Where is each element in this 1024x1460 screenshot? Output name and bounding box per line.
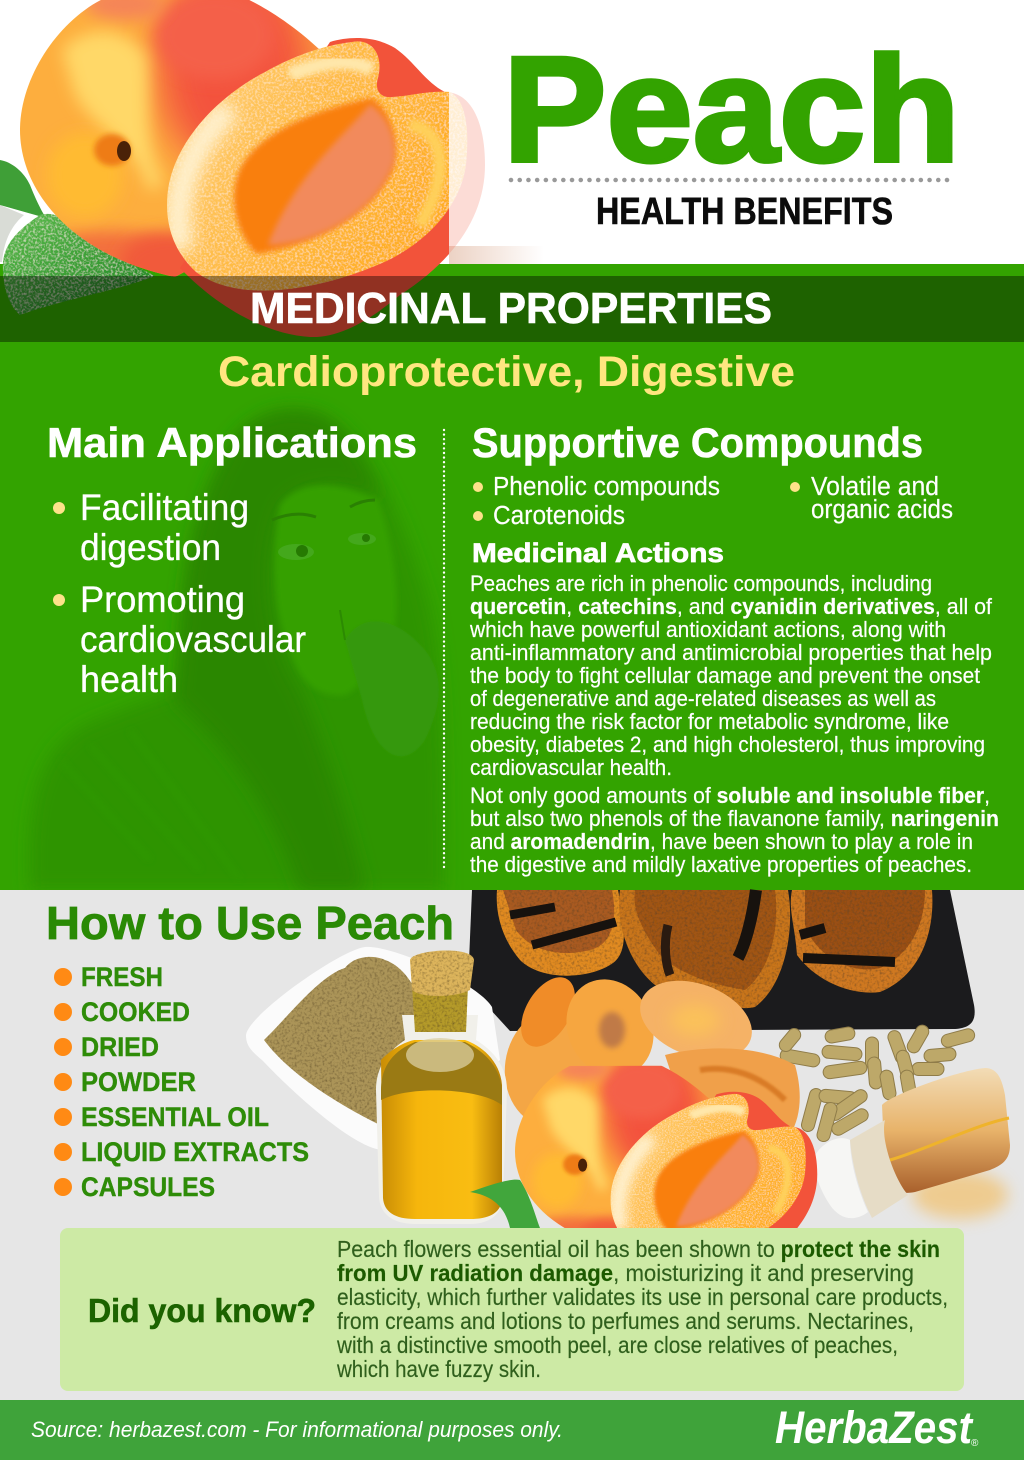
source note: Source: herbazest.com - For informational purposes only. [31, 1417, 563, 1442]
heading: supportive compounds: Supportive Compounds [472, 419, 923, 466]
list: forms of use: DRIED [81, 1032, 159, 1062]
text block: medicinal actions: reducing the risk factor for metabolic syndrome, like [470, 709, 949, 734]
list: supportive compounds: Phenolic compounds [493, 473, 720, 501]
subtitle: HEALTH BENEFITS [596, 191, 893, 233]
text block: did you know: which have fuzzy skin. [336, 1356, 541, 1382]
title: Peach: Peach [503, 25, 960, 193]
icon: glass jar lying on its side [814, 1068, 1010, 1219]
text block: medicinal actions [469, 571, 999, 877]
text block: medicinal actions: and aromadendrin, have been shown to play a role in [470, 829, 973, 854]
text block: medicinal actions: Peaches are rich in phenolic compounds, including [470, 571, 932, 596]
icon: capsules [777, 1023, 976, 1143]
background figure: woman smelling a bottle [29, 409, 444, 890]
bullet 1 [53, 502, 65, 514]
heading: main applications: Main Applications [47, 419, 417, 466]
icon: dried peaches [497, 965, 800, 1135]
list: forms of use: POWDER [81, 1067, 196, 1097]
list: main applications: health [80, 659, 178, 700]
logo: HerbaZest: HerbaZest [775, 1402, 974, 1453]
icon: peach leaves [0, 160, 155, 315]
dark title band [0, 276, 1024, 342]
list: forms of use: FRESH [81, 962, 163, 992]
panel: did you know [60, 1228, 964, 1391]
dotted column divider [443, 430, 445, 870]
icon: black plate with grilled peaches [468, 890, 975, 1031]
text block: medicinal actions: the digestive and mildly laxative properties of peaches. [470, 852, 972, 877]
text block: did you know: with a distinctive smooth peel, are close relatives of peaches, [336, 1332, 898, 1358]
heading: did you know: Did you know? [88, 1292, 316, 1329]
list: main applications: digestion [80, 527, 221, 568]
text block: did you know: from UV radiation damage, moisturizing it and preserving [337, 1260, 914, 1286]
icon: lower peach pair [515, 1066, 818, 1228]
footer bar [0, 1400, 1024, 1460]
text block: medicinal actions: anti-inflammatory and antimicrobial properties that help [470, 640, 992, 665]
text block: did you know: from creams and lotions to perfumes and serums. Nectarines, [337, 1308, 914, 1334]
text block: did you know [336, 1236, 948, 1382]
dotted rule under title [511, 178, 947, 182]
text block: did you know: Peach flowers essential oil has been shown to protect the skin [337, 1236, 940, 1262]
text block: medicinal actions: of degenerative and age-related diseases as well as [470, 686, 936, 711]
list: forms of use [54, 962, 309, 1202]
panel: how to use background [0, 890, 1024, 1400]
text block: medicinal actions: obesity, diabetes 2, and high cholesterol, thus improving [470, 732, 985, 757]
fade strip above band [449, 246, 544, 264]
list: main applications: Facilitating [80, 487, 249, 528]
list: forms of use: COOKED [81, 997, 190, 1027]
text block: medicinal actions: Not only good amounts of soluble and insoluble fiber, [470, 783, 990, 808]
text block: medicinal actions: the body to fight cellular damage and prevent the onset [470, 663, 981, 688]
heading: medicinal actions: Medicinal Actions [472, 538, 724, 568]
list: forms of use: LIQUID EXTRACTS [81, 1137, 309, 1167]
icon: small leaf beside lower peach [470, 1180, 540, 1228]
logo: HerbaZest: ® [971, 1438, 979, 1449]
icon: peach, whole and halved [0, 0, 485, 337]
text block: medicinal actions: but also two phenols of the flavanone family, naringenin [470, 806, 999, 831]
property list: Cardioprotective, Digestive [218, 348, 795, 396]
green band behind the header [0, 264, 1024, 890]
text block: did you know: elasticity, which further validates its use in personal care products, [337, 1284, 948, 1310]
bullet 2 [53, 594, 65, 606]
icon: essential oil bottle [376, 951, 507, 1224]
section heading: medicinal properties: MEDICINAL PROPERTIES [250, 284, 772, 333]
heading: how to use peach: How to Use Peach [46, 897, 454, 949]
text block: medicinal actions: quercetin, catechins, and cyanidin derivatives, all of [470, 594, 993, 619]
list: main applications: Promoting [80, 579, 245, 620]
list: forms of use: ESSENTIAL OIL [81, 1102, 269, 1132]
icon: bowl of powder [246, 947, 500, 1150]
list: supportive compounds: Volatile and [811, 473, 939, 501]
list: supportive compounds: organic acids [811, 496, 953, 524]
list: main applications [53, 487, 306, 700]
list: forms of use: CAPSULES [81, 1172, 215, 1202]
list: main applications: cardiovascular [80, 619, 306, 660]
text block: medicinal actions: cardiovascular health. [470, 755, 672, 780]
text block: medicinal actions: which have powerful antioxidant actions, along with [469, 617, 946, 642]
list: supportive compounds: Carotenoids [493, 502, 625, 530]
list: supportive compounds [473, 473, 953, 530]
